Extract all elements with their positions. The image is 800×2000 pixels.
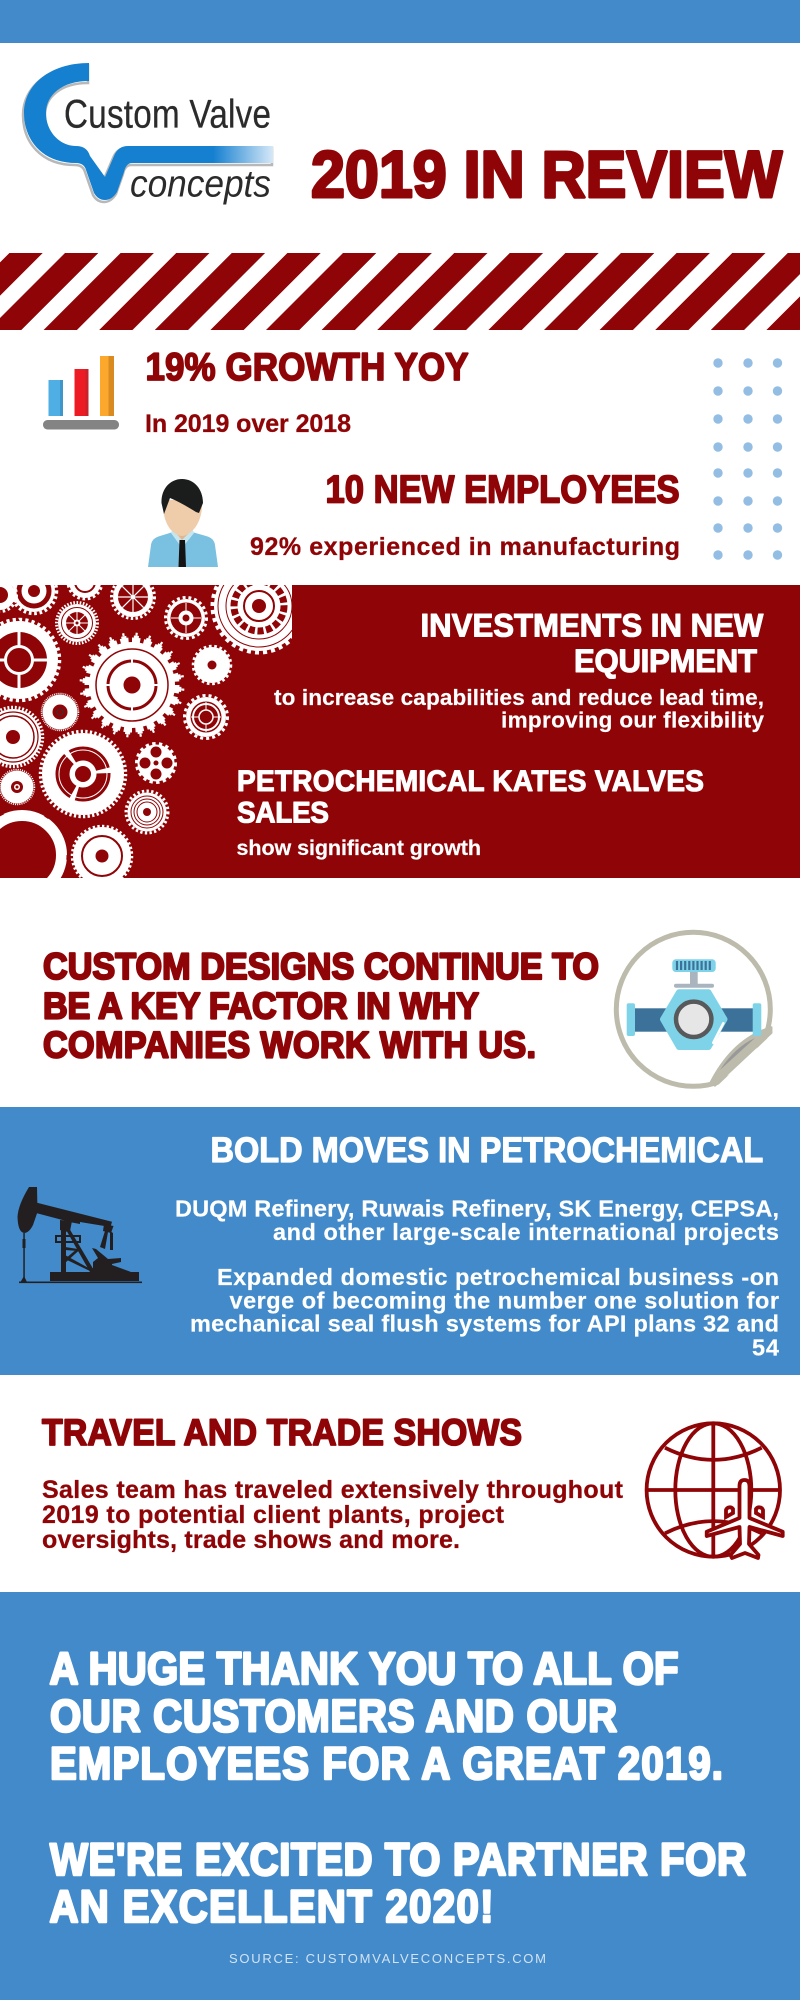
text: sales team travel: Sales team has traveled extensively throughout bbox=[42, 1476, 624, 1504]
heading: custom designs: CUSTOM DESIGNS CONTINUE TO bbox=[43, 946, 599, 987]
heading: petrochemical kates valves sales bbox=[237, 765, 704, 830]
text: domestic petrochemical business: mechanical seal flush systems for API plans 32 and bbox=[190, 1310, 779, 1336]
icon: bar chart bbox=[43, 356, 119, 430]
heading: custom designs: COMPANIES WORK WITH US. bbox=[43, 1024, 536, 1066]
logo: Custom Valve Concepts: concepts bbox=[130, 162, 271, 205]
icon: oil pumpjack bbox=[18, 1187, 142, 1283]
dot grid bbox=[713, 358, 782, 560]
heading: thank you message: OUR CUSTOMERS AND OUR bbox=[50, 1691, 617, 1742]
diagonal stripe band bbox=[0, 253, 800, 330]
text: increase capabilities: improving our flexibility bbox=[501, 708, 764, 732]
text: sales team travel bbox=[42, 1476, 624, 1554]
text: increase capabilities bbox=[274, 685, 764, 732]
text: sales team travel: oversights, trade shows and more. bbox=[42, 1526, 460, 1554]
heading: investments in new equipment bbox=[420, 607, 764, 679]
heading: travel and trade shows: TRAVEL AND TRADE SHOWS bbox=[42, 1412, 522, 1453]
logo: Custom Valve Concepts: Custom Valve bbox=[64, 92, 271, 136]
text: domestic petrochemical business: verge of becoming the number one solution for bbox=[230, 1288, 779, 1314]
text: domestic petrochemical business: Expanded domestic petrochemical business -on bbox=[217, 1264, 779, 1290]
text: show significant growth: show significant growth bbox=[236, 836, 481, 860]
heading: excited to partner bbox=[50, 1835, 746, 1933]
panel: custom designs bbox=[43, 932, 795, 1100]
text: experienced in manufacturing: 92% experienced in manufacturing bbox=[250, 533, 680, 561]
title: 2019 IN REVIEW bbox=[311, 138, 782, 212]
panel: thank you (blue) bbox=[0, 1592, 800, 2000]
heading: excited to partner: AN EXCELLENT 2020! bbox=[50, 1882, 493, 1933]
heading: new employees: 10 NEW EMPLOYEES bbox=[326, 468, 680, 511]
panel: growth and employees bbox=[43, 344, 782, 567]
text: in 2019 over 2018: In 2019 over 2018 bbox=[145, 410, 351, 438]
heading: excited to partner: WE'RE EXCITED TO PARTNER FOR bbox=[50, 1835, 746, 1886]
text: domestic petrochemical business bbox=[190, 1264, 779, 1360]
heading: thank you message: A HUGE THANK YOU TO ALL OF bbox=[50, 1644, 679, 1695]
panel: travel and trade shows bbox=[42, 1412, 783, 1558]
gears illustration bbox=[0, 585, 292, 878]
heading: thank you message bbox=[50, 1644, 723, 1790]
heading: bold moves: BOLD MOVES IN PETROCHEMICAL bbox=[210, 1131, 763, 1170]
text: refinery projects: and other large-scale international projects bbox=[273, 1219, 779, 1245]
text: domestic petrochemical business: 54 bbox=[752, 1334, 779, 1360]
panel: bold moves in petrochemical (blue) bbox=[0, 1107, 800, 1375]
icon: person bbox=[148, 479, 218, 567]
text: refinery projects: DUQM Refinery, Ruwais Refinery, SK Energy, CEPSA, bbox=[175, 1196, 779, 1222]
source line: SOURCE: CUSTOMVALVECONCEPTS.COM bbox=[229, 1951, 546, 1966]
text: sales team travel: 2019 to potential client plants, project bbox=[42, 1501, 505, 1529]
text: refinery projects bbox=[175, 1196, 779, 1245]
heading: investments in new equipment: EQUIPMENT bbox=[574, 643, 757, 679]
logo: Custom Valve Concepts bbox=[23, 63, 273, 205]
heading: custom designs: BE A KEY FACTOR IN WHY bbox=[43, 985, 479, 1027]
heading: custom designs bbox=[43, 946, 599, 1066]
heading: growth: 19% GROWTH YOY bbox=[146, 344, 469, 388]
heading: petrochemical kates valves sales: PETROCHEMICAL KATES VALVES bbox=[237, 765, 704, 798]
top blue bar bbox=[0, 0, 800, 43]
heading: petrochemical kates valves sales: SALES bbox=[237, 797, 329, 830]
heading: thank you message: EMPLOYEES FOR A GREAT 2019. bbox=[50, 1739, 723, 1790]
panel: investments (red) bbox=[0, 585, 800, 878]
icon: globe with airplane bbox=[647, 1423, 783, 1558]
icon: valve sticker bbox=[616, 932, 795, 1100]
text: increase capabilities: to increase capabilities and reduce lead time, bbox=[274, 685, 764, 710]
heading: investments in new equipment: INVESTMENTS IN NEW bbox=[420, 607, 764, 644]
